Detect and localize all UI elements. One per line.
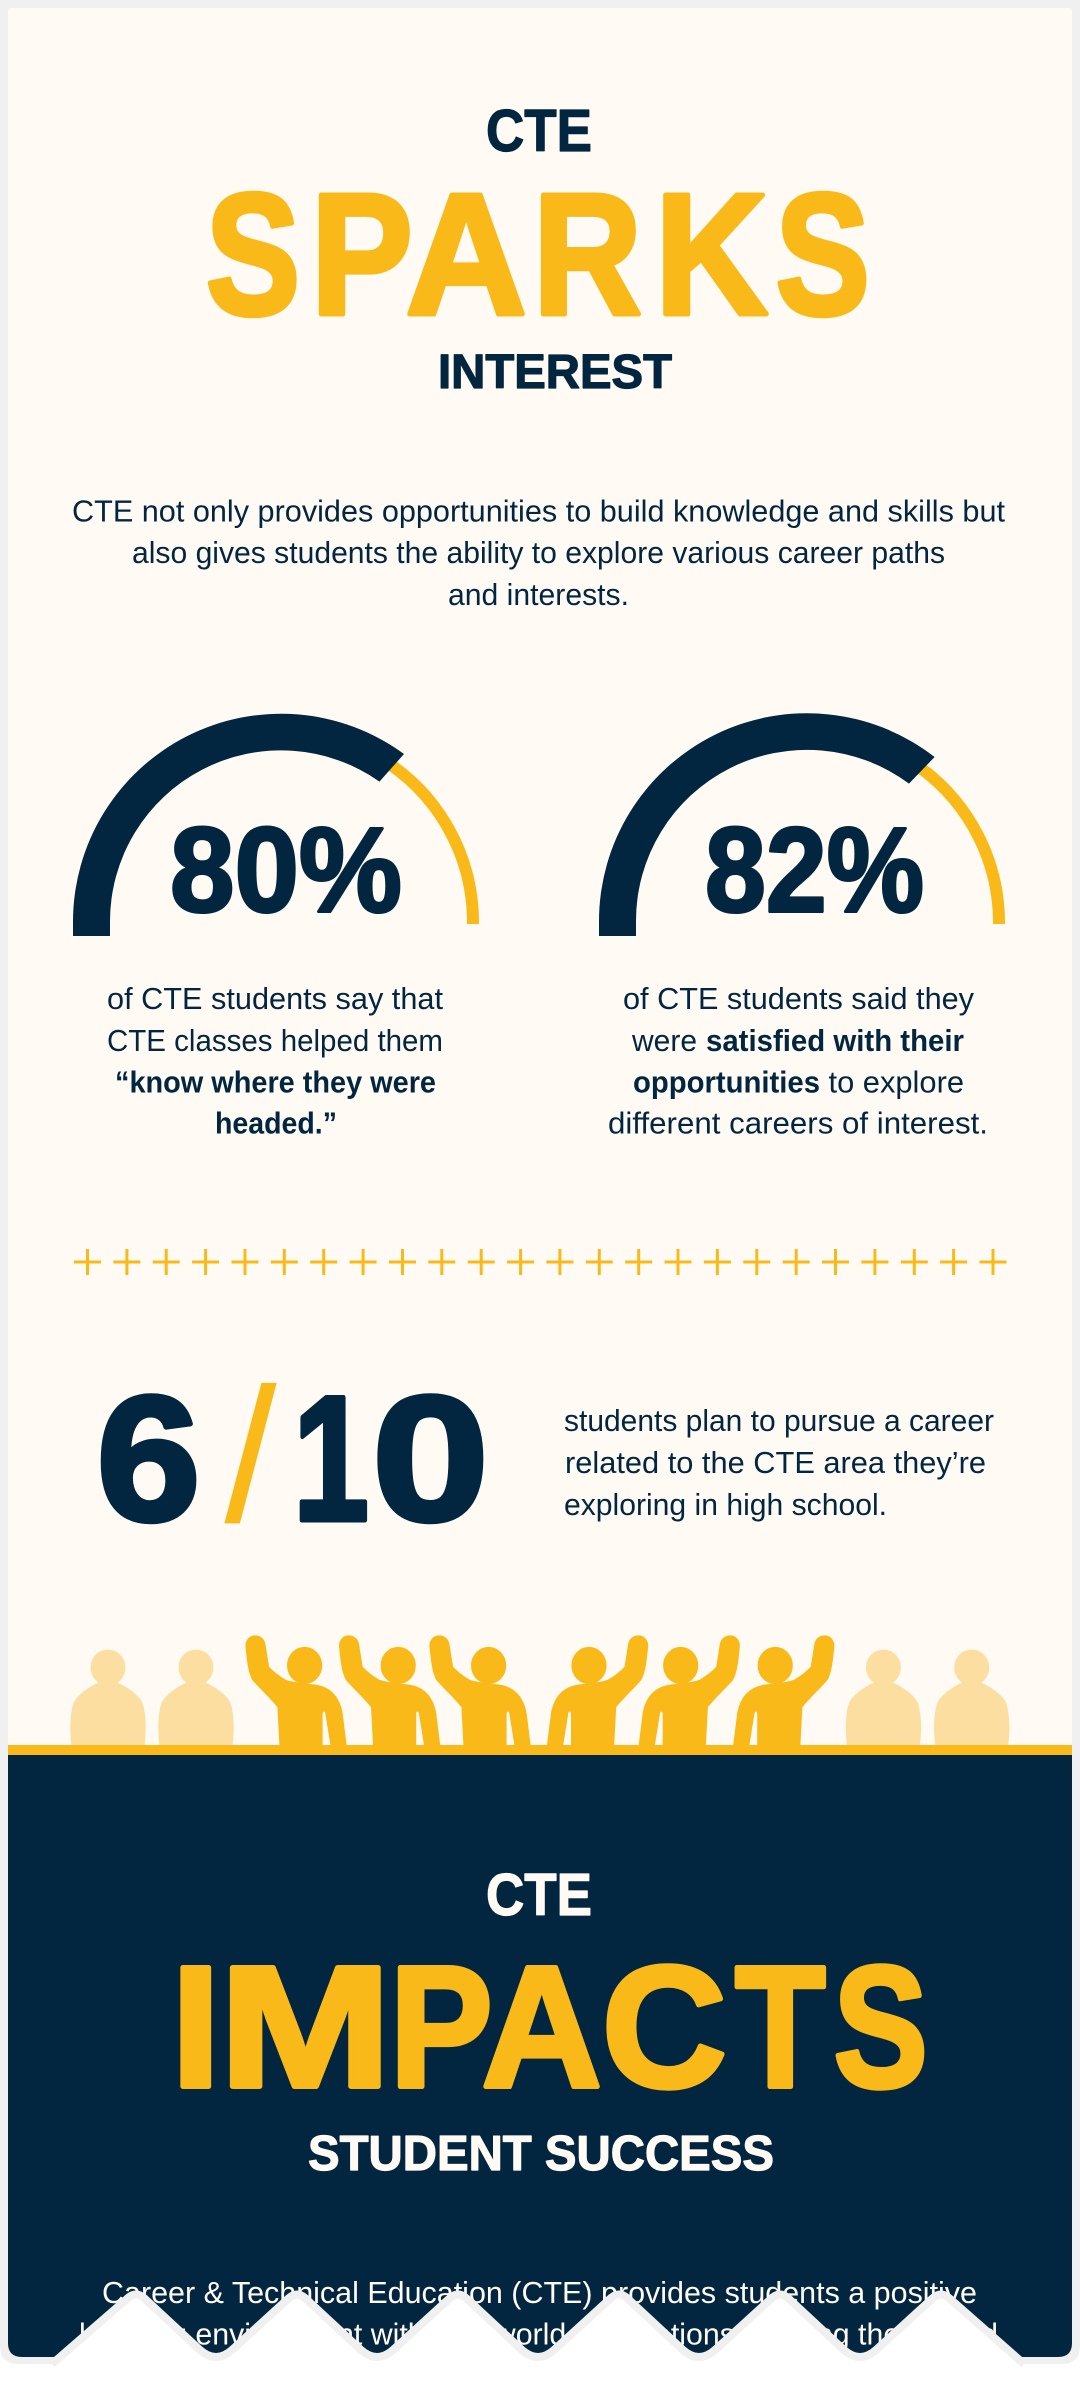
stat description: exploring in high school. xyxy=(564,1487,887,1522)
gauge: 82% xyxy=(599,713,999,938)
stat description: students plan to pursue a career xyxy=(564,1403,994,1438)
title: CTE Impacts Student Success: STUDENT SUCCESS xyxy=(308,2127,774,2181)
intro text: CTE not only provides opportunities to build knowledge and skills but xyxy=(72,494,1005,528)
caption: 80% xyxy=(107,981,443,1140)
title: CTE Impacts Student Success: A xyxy=(482,1930,602,2124)
stat: 6/10: 0 xyxy=(372,1359,489,1558)
stat: 6/10: 6 xyxy=(96,1359,200,1558)
title: CTE Impacts Student Success: I xyxy=(171,1930,220,2124)
title: CTE Impacts Student Success xyxy=(171,1862,928,2181)
stat description: related to the CTE area they’re xyxy=(565,1445,986,1480)
title: CTE Sparks Interest: R xyxy=(533,157,642,351)
title: CTE Sparks Interest: CTE xyxy=(486,98,592,164)
torn zigzag edge xyxy=(52,2294,1024,2392)
title: CTE Impacts Student Success: M xyxy=(219,1930,392,2124)
panel: cream upper section xyxy=(8,8,1072,1746)
intro text: also gives students the ability to explore various career paths xyxy=(132,535,945,570)
caption: 80%: “know where they were xyxy=(115,1064,436,1100)
caption: 82% xyxy=(608,981,988,1140)
body text: CTE definition, cut off by torn edge: Career & Technical Education (CTE) provides students a positive xyxy=(102,2275,977,2310)
icon: row of students, six raising hands xyxy=(70,1636,1009,1745)
title: CTE Sparks Interest xyxy=(206,98,870,399)
stat: 6/10 xyxy=(96,1350,489,1562)
gauge: 80% xyxy=(73,714,473,938)
caption: 82%: of CTE students said they xyxy=(623,981,974,1016)
title: CTE Impacts Student Success: T xyxy=(735,1930,826,2124)
title: CTE Sparks Interest: S xyxy=(776,157,870,351)
gauge: 80%: 80% xyxy=(170,802,402,938)
title: CTE Sparks Interest: S xyxy=(206,157,300,351)
stat description xyxy=(564,1403,994,1522)
title: CTE Sparks Interest: P xyxy=(311,157,413,351)
title: CTE Sparks Interest: K xyxy=(655,157,768,351)
title: CTE Impacts Student Success: P xyxy=(390,1930,493,2124)
title: CTE Sparks Interest: A xyxy=(406,157,527,351)
body text: CTE definition, cut off by torn edge: learning environment with real-world applications, helping them build xyxy=(79,2316,998,2352)
caption: 82%: different careers of interest. xyxy=(608,1106,988,1140)
body text: CTE definition, cut off by torn edge xyxy=(79,2275,998,2352)
panel: navy lower section xyxy=(8,1700,1072,2357)
title: CTE Impacts Student Success: C xyxy=(602,1930,727,2124)
stat: 6/10: 1 xyxy=(293,1359,369,1558)
title: CTE Sparks Interest: INTEREST xyxy=(438,346,672,399)
caption: 80%: of CTE students say that xyxy=(107,981,443,1016)
title: CTE Impacts Student Success: CTE xyxy=(486,1862,592,1928)
gauge: 82%: 82% xyxy=(705,802,924,938)
intro text xyxy=(72,494,1005,612)
caption: 82%: satisfied with their xyxy=(706,1023,964,1058)
title: CTE Impacts Student Success: S xyxy=(834,1930,928,2124)
caption: 80%: headed.” xyxy=(215,1106,337,1140)
caption: 82%: to explore xyxy=(828,1064,964,1100)
caption: 82%: were xyxy=(631,1023,697,1058)
caption: 82%: opportunities xyxy=(633,1064,820,1100)
stat: 6/10: / xyxy=(225,1350,276,1562)
intro text: and interests. xyxy=(448,577,629,612)
caption: 80%: CTE classes helped them xyxy=(107,1023,443,1058)
